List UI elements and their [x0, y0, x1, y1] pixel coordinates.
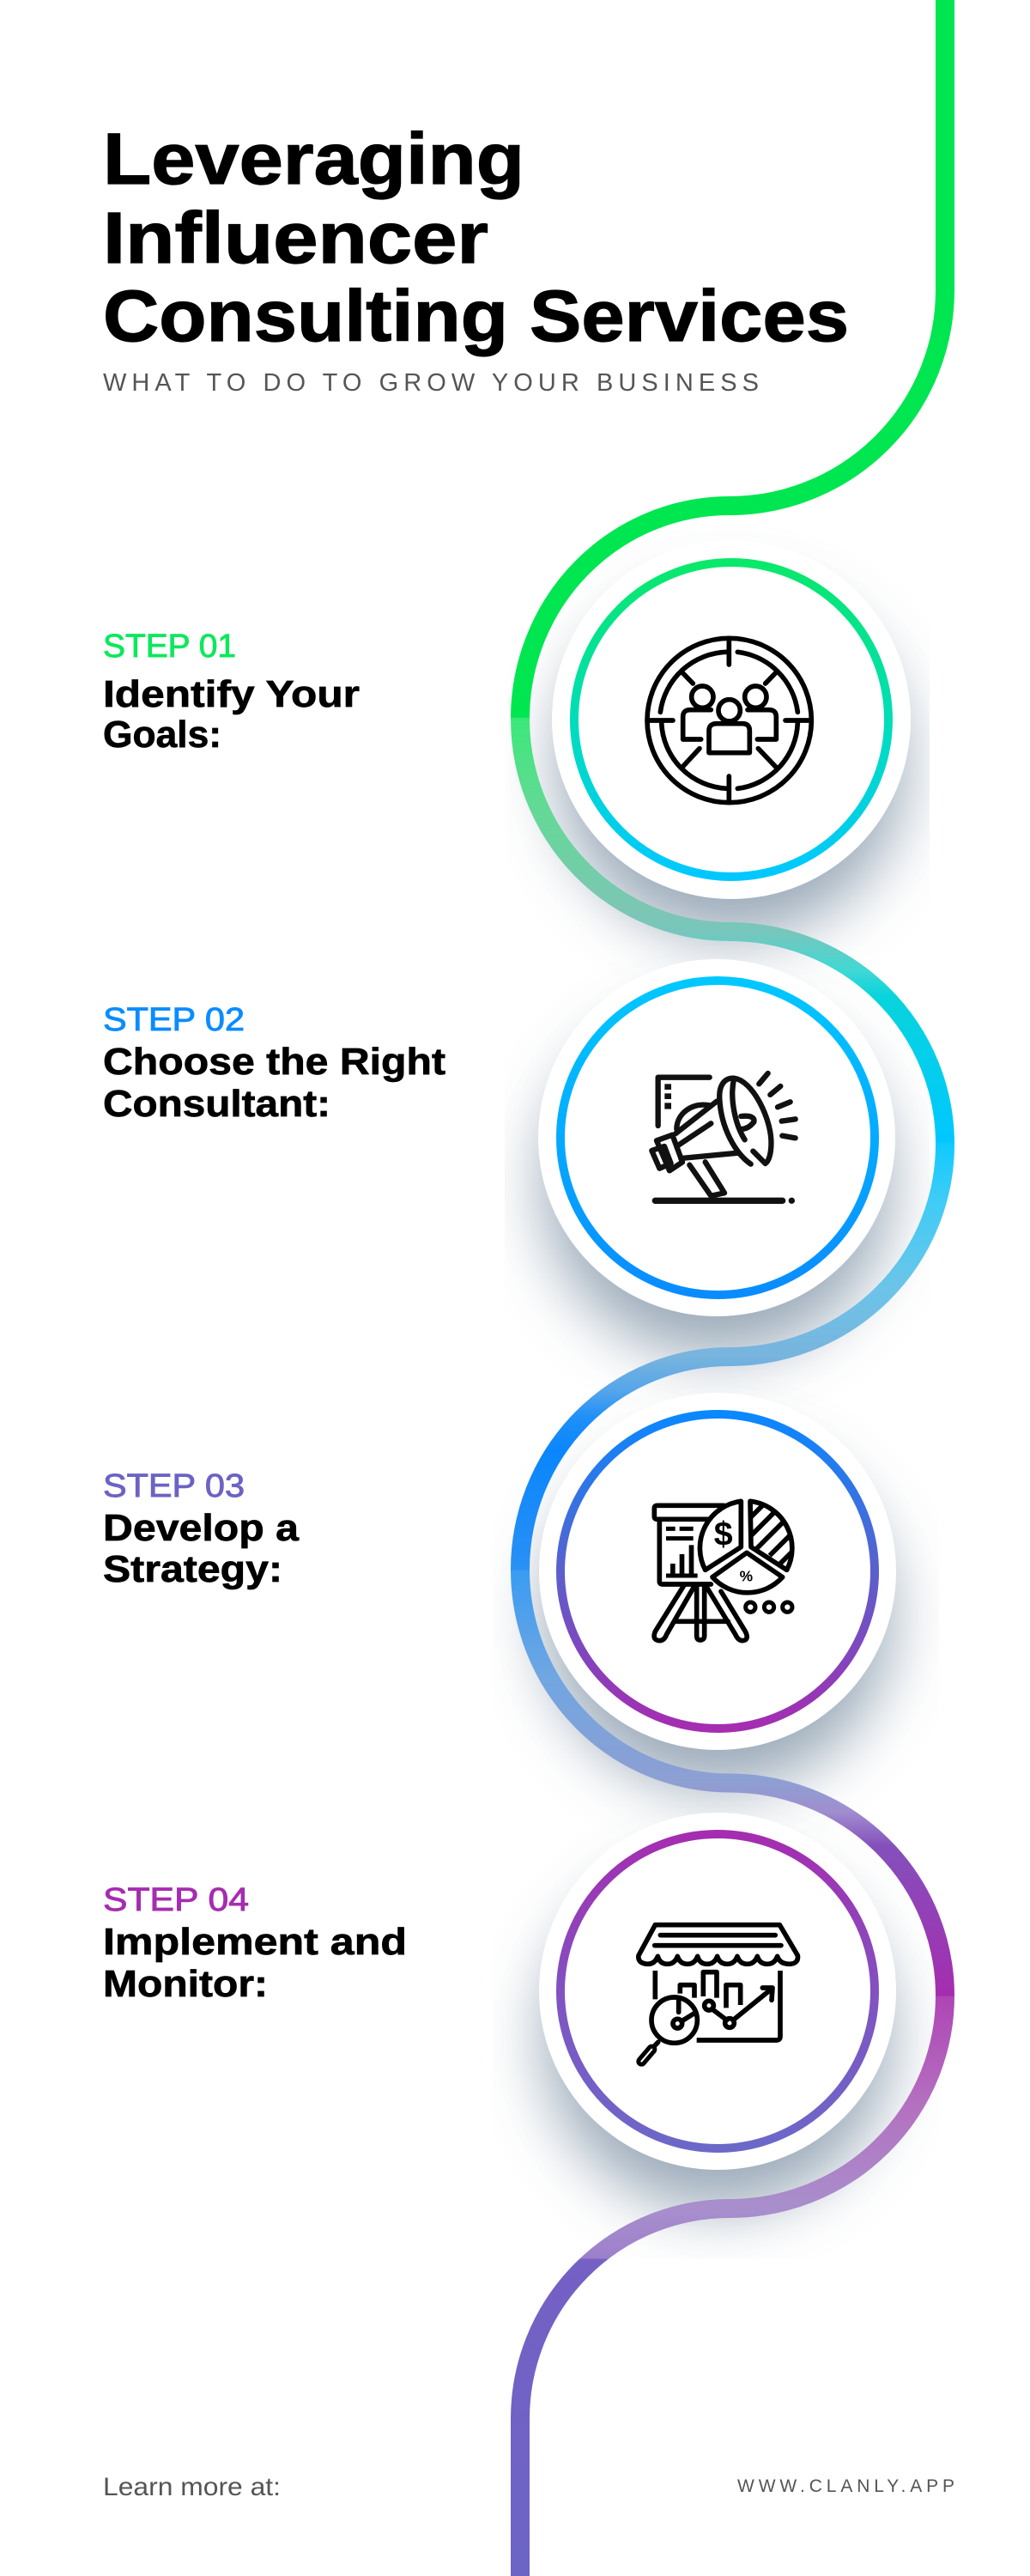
step 02 text: Consultant: [103, 1083, 330, 1125]
percent sign: % [740, 1567, 753, 1584]
step 04 text: Monitor: [103, 1963, 268, 2005]
step 03 text: STEP 03 [103, 1468, 245, 1504]
shadow: step 01 [557, 590, 906, 939]
step 02 text [103, 1002, 445, 1125]
step 02 text: Choose the Right [103, 1041, 445, 1083]
step 03 text [103, 1468, 300, 1590]
circle badge: step 02 [538, 959, 895, 1316]
step 03 text: Develop a [103, 1507, 300, 1549]
footer: learn more: Learn more at: [103, 2473, 281, 2501]
winding gradient path [520, 0, 945, 2576]
icon: shop with chart and magnifier [639, 1925, 797, 2062]
step 04 text: STEP 04 [103, 1882, 249, 1918]
icon: target with people [647, 638, 811, 803]
step 01 text [103, 629, 360, 756]
shadow: step 02 [542, 1008, 891, 1357]
circle badge: step 04 [539, 1813, 896, 2170]
shadow: step 03 [543, 1442, 892, 1790]
step 01 text: STEP 01 [103, 629, 236, 665]
title [103, 118, 849, 356]
step 01 text: Identify Your [103, 673, 360, 715]
title: Influencer [103, 197, 488, 278]
step 03 text: Strategy: [103, 1548, 282, 1590]
shadow: step 04 [543, 1862, 892, 2210]
step 01 text: Goals: [103, 714, 221, 756]
circle badge: step 03 [539, 1393, 896, 1750]
title: Consulting Services [103, 276, 849, 356]
footer: website: WWW.CLANLY.APP [737, 2476, 954, 2496]
dollar sign: $ [714, 1515, 733, 1552]
subtitle: WHAT TO DO TO GROW YOUR BUSINESS [103, 369, 759, 397]
step 02 text: STEP 02 [103, 1002, 245, 1038]
step 04 text: Implement and [103, 1921, 407, 1963]
circle badge: step 01 [552, 540, 911, 899]
step 04 text [103, 1882, 407, 2005]
icon: megaphone [651, 1073, 796, 1204]
title: Leveraging [103, 118, 524, 199]
icon: presentation easel with pie chart [654, 1501, 798, 1641]
